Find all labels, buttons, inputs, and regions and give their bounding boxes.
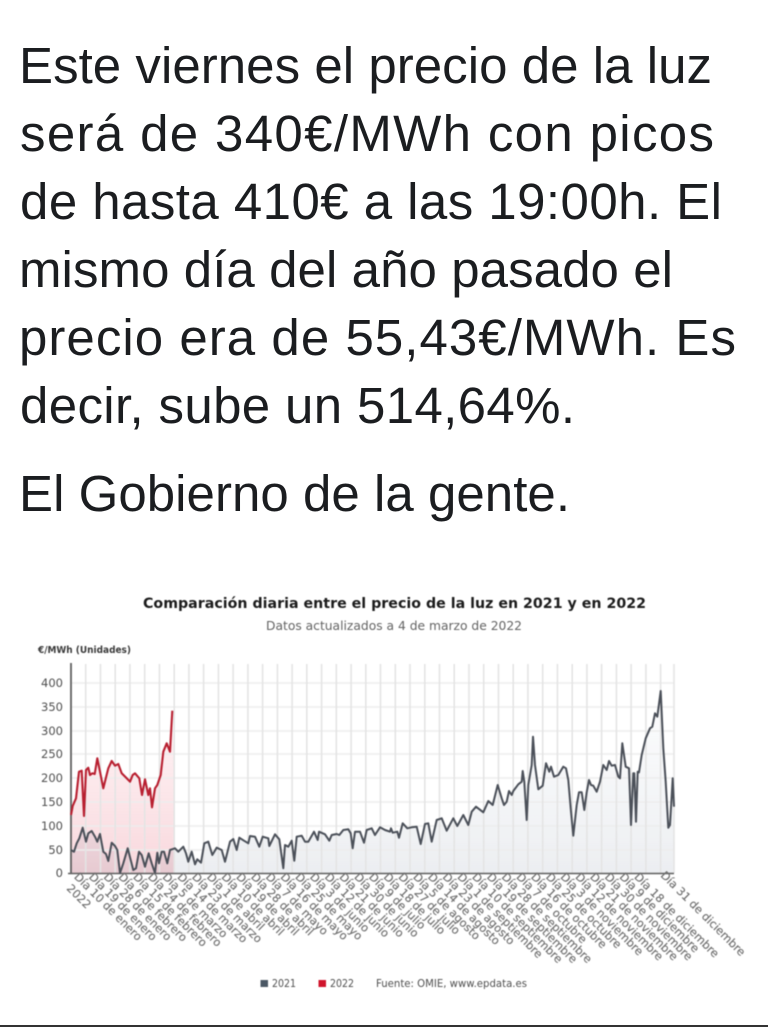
axes [68, 663, 674, 874]
legend and source: Fuente: OMIE, www.epdata.es [376, 978, 527, 990]
grid lines [72, 664, 674, 873]
y axis labels: 150 [41, 795, 63, 809]
x axis date labels: Día 7 de octubre [514, 870, 589, 946]
y axis labels: 300 [41, 724, 63, 738]
chart panel [37, 596, 748, 990]
2022 price line [71, 711, 172, 816]
x axis date labels: Día 31 de diciembre [658, 869, 748, 959]
x axis date labels: Día 23 de agosto [440, 870, 517, 948]
headline text: Este viernes el precio de la luz [19, 37, 712, 94]
x axis date labels: Día 23 de marzo [189, 870, 265, 946]
x axis date labels: Día 21 de noviembre [587, 870, 680, 963]
x axis date labels: Día 1 de septiembre [455, 870, 545, 961]
y axis unit label: €/MWh (Unidades) [37, 645, 131, 656]
x axis date labels: Día 12 de junio [322, 870, 392, 940]
x axis date labels: Día 25 de mayo [292, 870, 365, 943]
headline text: de hasta 410€ a las 19:00h. El [20, 173, 722, 230]
x axis date labels: Día 28 de abril [248, 870, 316, 938]
closing line: El Gobierno de la gente. [19, 465, 570, 522]
x axis date labels: Día 27 de julio [396, 870, 463, 937]
x axis date labels [64, 869, 748, 966]
x axis date labels: Día 5 de marzo [160, 870, 230, 941]
legend and source: 2021 [272, 978, 296, 990]
x axis date labels: Día 5 de agosto [410, 870, 483, 943]
y axis labels: 250 [41, 747, 63, 761]
y axis labels: 400 [41, 676, 63, 690]
x axis date labels: Día 10 de enero [71, 870, 145, 944]
y axis labels: 100 [41, 819, 63, 833]
x axis date labels: Día 19 de abril [233, 870, 301, 938]
x axis date labels: Día 1 de abril [204, 870, 267, 933]
2022 area fill [71, 711, 174, 873]
x axis date labels: Día 24 de febrero [145, 870, 224, 950]
x axis date labels: Día 18 de diciembre [631, 870, 721, 960]
x axis date labels: Día 30 de noviembre [602, 870, 695, 963]
x axis date labels: Día 30 de junio [351, 870, 421, 940]
x axis date labels: Día 16 de mayo [278, 870, 350, 943]
x axis date labels: Día 6 de febrero [116, 870, 190, 944]
headline text: precio era de 55,43€/MWh. Es [19, 309, 736, 366]
x axis date labels: Día 7 de mayo [263, 870, 330, 938]
legend and source: 2022 [330, 978, 354, 990]
x axis date labels: Día 12 de noviembre [573, 870, 666, 963]
x axis date labels: Día 28 de enero [101, 870, 174, 944]
y axis labels: 200 [41, 771, 63, 785]
headline text: mismo día del año pasado el [19, 241, 673, 298]
headline text [19, 37, 736, 434]
x axis date labels: Día 14 de agosto [425, 870, 503, 948]
legend and source [260, 978, 527, 990]
x axis date labels: Día 18 de julio [381, 870, 448, 937]
x axis date labels: Día 3 de junio [307, 870, 372, 935]
x axis date labels: Día 10 de septiembre [469, 870, 565, 966]
x axis date labels: Día 19 de septiembre [484, 870, 580, 966]
2021 area fill [71, 691, 674, 873]
x axis date labels: Día 16 de octubre [528, 870, 609, 951]
x axis date labels: Día 9 de diciembre [617, 870, 702, 955]
x axis date labels: Día 3 de noviembre [558, 870, 646, 958]
x axis date labels: Día 19 de enero [86, 870, 159, 944]
x axis date labels: Día 21 de junio [337, 870, 406, 940]
x axis date labels: Día 28 de septiembre [499, 870, 594, 966]
x axis date labels: 2022 [64, 882, 93, 911]
headline text: decir, sube un 514,64%. [20, 377, 575, 434]
y axis labels: 0 [56, 866, 63, 880]
headline text: será de 340€/MWh con picos [20, 105, 714, 162]
y axis labels: 50 [48, 843, 63, 857]
x axis date labels: Día 25 de octubre [543, 870, 624, 951]
2021 price line [71, 691, 674, 873]
x axis date labels: Día 9 de julio [366, 870, 428, 932]
x axis date labels: Día 15 de febrero [130, 870, 209, 950]
x axis date labels: Día 14 de marzo [175, 870, 250, 946]
chart title: Comparación diaria entre el precio de la luz en 2021 y en 2022 [143, 596, 646, 612]
y axis labels [41, 676, 63, 880]
x axis date labels: Día 10 de abril [219, 870, 287, 938]
bottom border [0, 1025, 768, 1027]
chart subtitle: Datos actualizados a 4 de marzo de 2022 [266, 619, 522, 633]
y axis labels: 350 [41, 700, 63, 714]
